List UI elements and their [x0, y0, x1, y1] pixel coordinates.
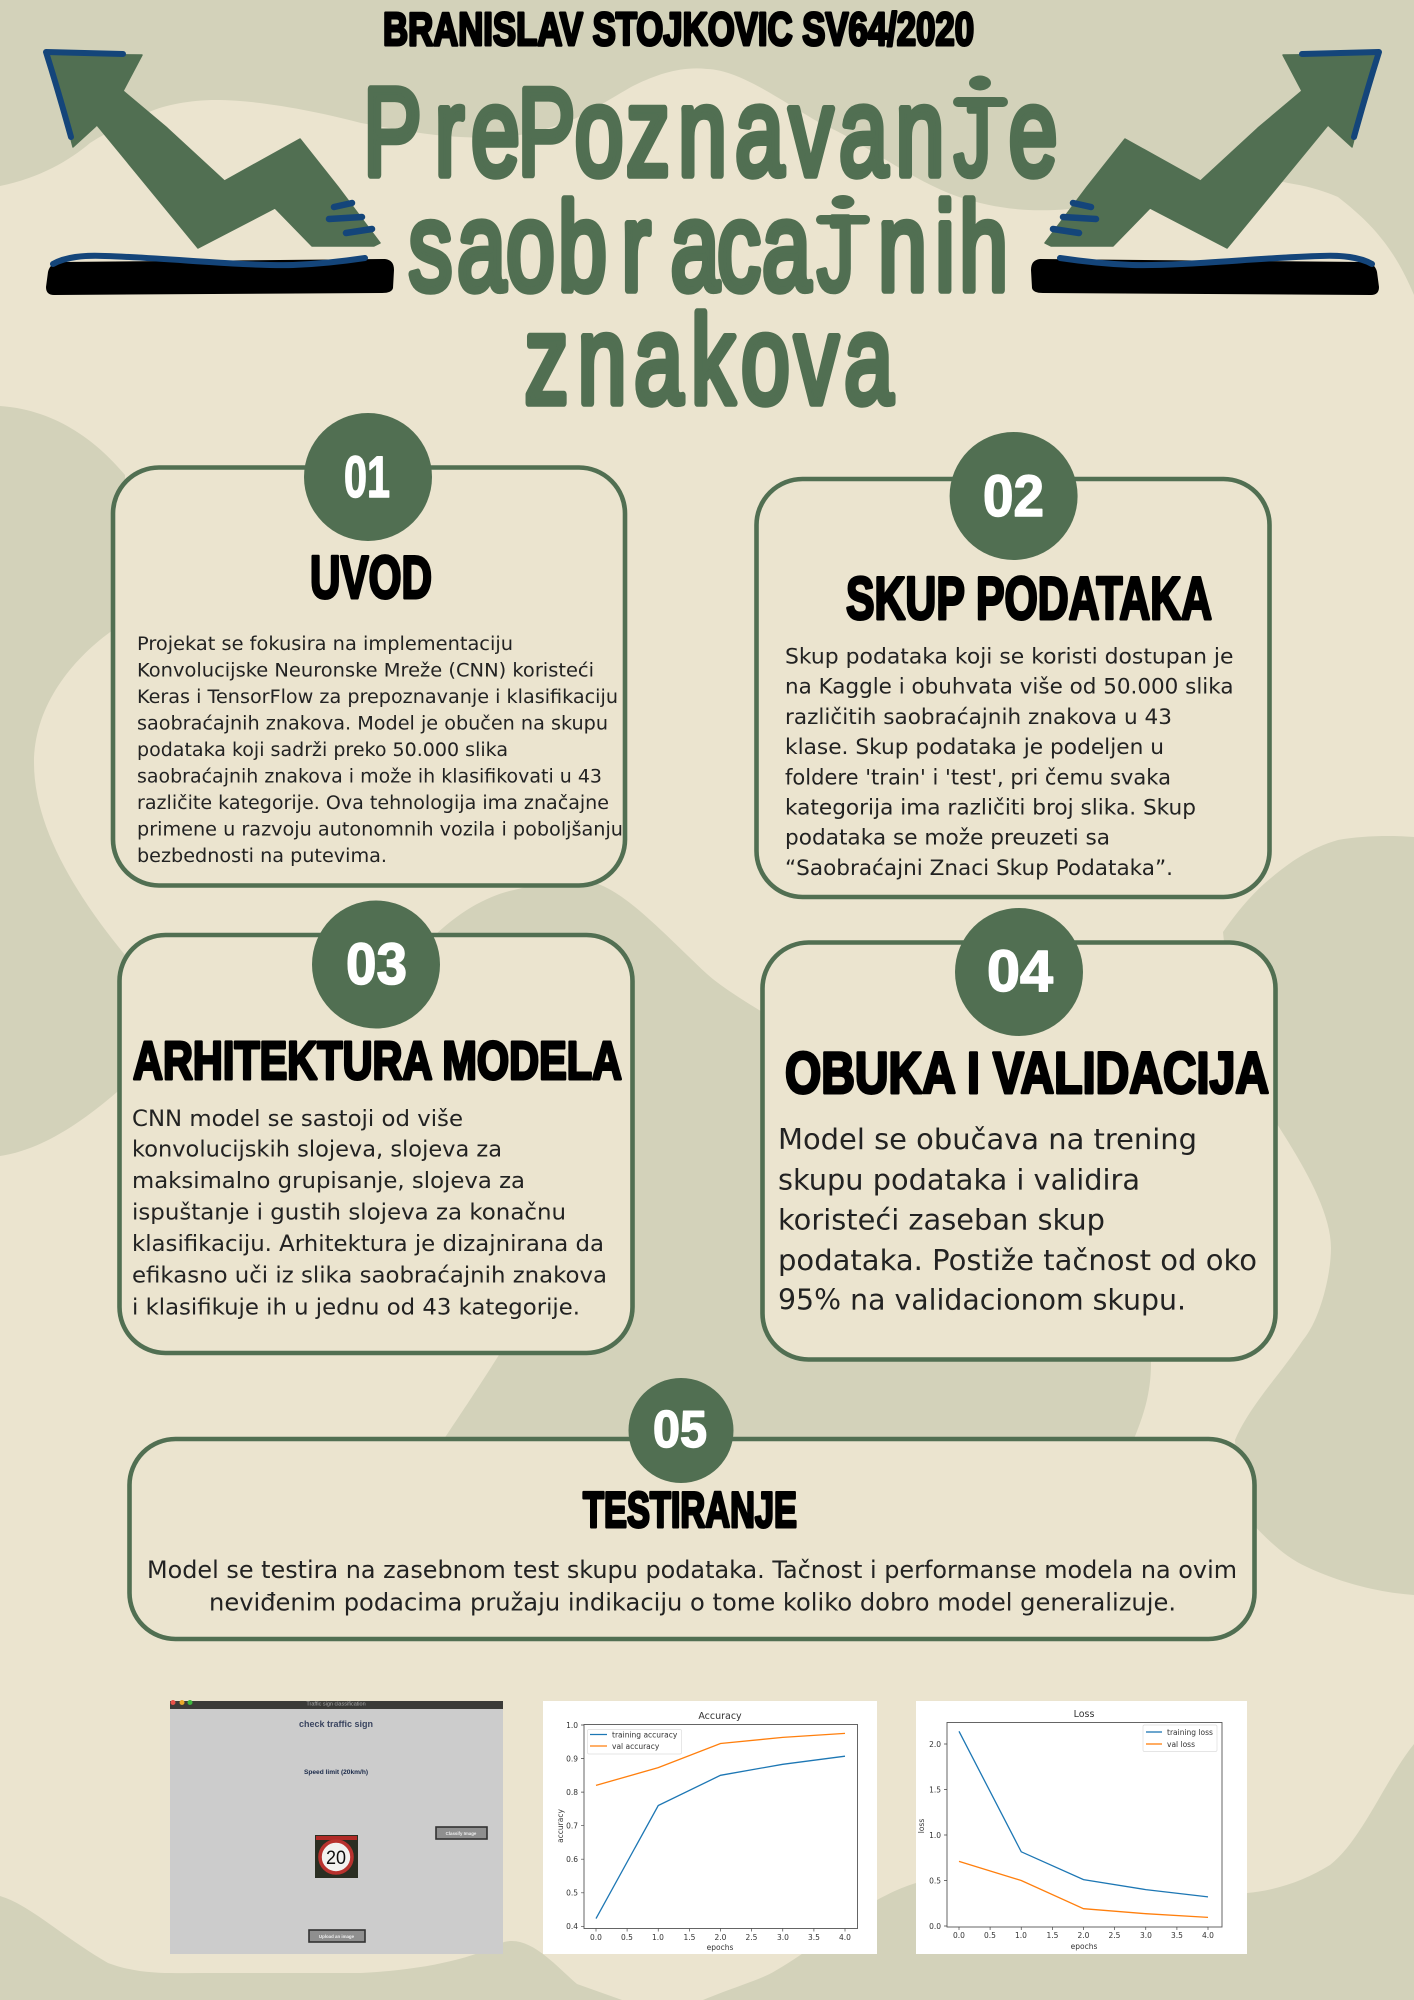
- line chart: accuracy: 1.0: [566, 1721, 578, 1730]
- panel: 03 arhitektura modela: maksimalno grupisanje, slojeva za: [132, 1169, 525, 1194]
- line chart: accuracy: 2.0: [715, 1933, 727, 1942]
- icon: left rising arrow on black base: [46, 52, 394, 295]
- panel: 04 obuka i validacija: [762, 908, 1276, 1360]
- panel: 05 testiranje: 05: [653, 1401, 707, 1459]
- line chart: accuracy: 2.5: [746, 1933, 758, 1942]
- line chart: loss: val loss: [1167, 1740, 1195, 1749]
- screenshot: traffic sign classification app: Speed limit (20km/h): [304, 1769, 368, 1776]
- line chart: loss: 1.5: [1047, 1931, 1059, 1940]
- line chart: accuracy: val accuracy: [612, 1742, 660, 1751]
- line chart: accuracy: 0.6: [566, 1855, 578, 1864]
- panel: 05 testiranje: Model se testira na zasebnom test skupu podataka. Tačnost i performanse modela na ovim: [147, 1556, 1237, 1584]
- line chart: loss: 2.5: [1109, 1931, 1121, 1940]
- screenshot: traffic sign classification app: Classify Image: [446, 1831, 477, 1836]
- panel: 04 obuka i validacija: OBUKA I VALIDACIJA: [785, 1041, 1269, 1106]
- icon: right rising arrow on black base: [1031, 52, 1379, 295]
- panel: 01 uvod: Projekat se fokusira na implementaciju: [137, 634, 513, 655]
- panel: 02 skup podataka: klase. Skup podataka je podeljen u: [785, 735, 1164, 759]
- panel: 02 skup podataka: podataka se može preuzeti sa: [785, 826, 1110, 850]
- panel: 03 arhitektura modela: i klasifikuje ih u jednu od 43 kategorije.: [132, 1296, 580, 1320]
- screenshot: traffic sign classification app: 20: [326, 1848, 346, 1869]
- panel: 02 skup podataka: kategorija ima različiti broj slika. Skup: [785, 796, 1196, 820]
- panel: 01 uvod: Konvolucijske Neuronske Mreže (CNN) koristeći: [137, 660, 594, 682]
- panel: 01 uvod: [113, 413, 625, 886]
- panel: 02 skup podataka: [756, 432, 1270, 897]
- line chart: accuracy: Accuracy: [698, 1711, 742, 1722]
- panel: 05 testiranje: [130, 1378, 1254, 1639]
- panel: 02 skup podataka: 02: [983, 464, 1044, 529]
- panel: 02 skup podataka: foldere 'train' i 'test', pri čemu svaka: [785, 766, 1171, 790]
- line chart: loss: 1.0: [1015, 1931, 1027, 1940]
- panel: 02 skup podataka: “Saobraćajni Znaci Skup Podataka”.: [785, 856, 1173, 880]
- line chart: loss: 0.5: [984, 1931, 996, 1940]
- panel: 02 skup podataka: različitih saobraćajnih znakova u 43: [785, 705, 1172, 729]
- panel: 01 uvod: različite kategorije. Ova tehnologija ima značajne: [137, 793, 609, 814]
- line chart: accuracy: 1.0: [652, 1933, 664, 1942]
- line chart: loss: 4.0: [1202, 1931, 1214, 1940]
- panel: 01 uvod: saobraćajnih znakova. Model je obučen na skupu: [137, 714, 608, 734]
- line chart: loss: [916, 1701, 1247, 1954]
- line chart: loss: loss: [917, 1819, 926, 1833]
- line chart: accuracy: training accuracy: [612, 1730, 678, 1740]
- line chart: accuracy: 0.5: [566, 1888, 578, 1898]
- panel: 01 uvod: primene u razvoju autonomnih vozila i poboljšanju: [137, 820, 623, 840]
- panel: 04 obuka i validacija: podataka. Postiže tačnost od oko: [778, 1244, 1257, 1277]
- screenshot: traffic sign classification app: Traffic sign classification: [306, 1702, 366, 1708]
- panel: 04 obuka i validacija: 95% na validacionom skupu.: [778, 1284, 1186, 1316]
- line chart: loss: 2.0: [1078, 1931, 1090, 1940]
- screenshot: traffic sign classification app: check traffic sign: [299, 1719, 373, 1729]
- panel: 02 skup podataka: SKUP PODATAKA: [846, 565, 1212, 632]
- panel: 03 arhitektura modela: konvolucijskih slojeva, slojeva za: [132, 1138, 502, 1162]
- line chart: loss: 0.0: [929, 1922, 941, 1931]
- line chart: loss: Loss: [1074, 1709, 1094, 1720]
- panel: 01 uvod: 01: [344, 445, 390, 510]
- panel: 04 obuka i validacija: 04: [987, 939, 1053, 1004]
- screenshot: traffic sign classification app: Upload an image: [319, 1934, 355, 1939]
- panel: 03 arhitektura modela: ispuštanje i gustih slojeva za konačnu: [132, 1200, 566, 1226]
- line chart: accuracy: accuracy: [556, 1809, 565, 1843]
- line chart: loss: epochs: [1071, 1942, 1097, 1951]
- line chart: accuracy: 0.4: [566, 1922, 578, 1931]
- line chart: accuracy: 3.0: [777, 1933, 789, 1942]
- line chart: loss: 2.0: [929, 1740, 941, 1749]
- panel: 04 obuka i validacija: koristeći zaseban skup: [778, 1204, 1105, 1236]
- line chart: accuracy: 4.0: [839, 1933, 851, 1942]
- line chart: loss: 3.5: [1171, 1931, 1183, 1940]
- line chart: loss: 3.0: [1140, 1931, 1152, 1940]
- line chart: accuracy: 1.5: [684, 1933, 696, 1942]
- panel: 01 uvod: UVOD: [310, 544, 432, 611]
- line chart: accuracy: 3.5: [808, 1933, 820, 1942]
- panel: 01 uvod: bezbednosti na putevima.: [137, 846, 387, 867]
- panel: 02 skup podataka: na Kaggle i obuhvata više od 50.000 slika: [785, 674, 1234, 698]
- author name: BRANISLAV STOJKOVIC SV64/2020: [383, 3, 974, 55]
- line chart: loss: 1.5: [929, 1786, 941, 1794]
- line chart: accuracy: 0.9: [566, 1754, 578, 1764]
- panel: 04 obuka i validacija: skupu podataka i validira: [778, 1164, 1140, 1196]
- panel: 04 obuka i validacija: Model se obučava na trening: [778, 1123, 1197, 1156]
- panel: 01 uvod: podataka koji sadrži preko 50.000 slika: [137, 740, 508, 761]
- panel: 03 arhitektura modela: ARHITEKTURA MODELA: [133, 1031, 622, 1091]
- panel: 03 arhitektura modela: CNN model se sastoji od više: [132, 1107, 463, 1132]
- main title: PrePoznavanJe: [363, 61, 1057, 202]
- panel: 05 testiranje: TESTIRANJE: [583, 1482, 797, 1538]
- main title: [363, 61, 1057, 430]
- panel: 05 testiranje: neviđenim podacima pružaju indikaciju o tome koliko dobro model generalizuje.: [209, 1588, 1176, 1616]
- main title: znakova: [525, 289, 893, 430]
- line chart: accuracy: 0.5: [621, 1933, 633, 1942]
- line chart: accuracy: 0.0: [590, 1933, 602, 1942]
- screenshot: traffic sign classification app: [170, 1700, 503, 1954]
- panel: 01 uvod: Keras i TensorFlow za prepoznavanje i klasifikaciju: [137, 687, 618, 708]
- line chart: loss: 0.5: [929, 1876, 941, 1886]
- line chart: accuracy: 0.7: [566, 1822, 578, 1830]
- line chart: accuracy: [543, 1701, 877, 1954]
- line chart: loss: 0.0: [953, 1931, 965, 1940]
- line chart: loss: training loss: [1167, 1728, 1213, 1737]
- panel: 03 arhitektura modela: efikasno uči iz slika saobraćajnih znakova: [132, 1264, 607, 1288]
- line chart: loss: 1.0: [929, 1831, 941, 1840]
- panel: 03 arhitektura modela: klasifikaciju. Arhitektura je dizajnirana da: [132, 1232, 604, 1257]
- line chart: accuracy: epochs: [707, 1943, 733, 1952]
- panel: 02 skup podataka: Skup podataka koji se koristi dostupan je: [785, 644, 1234, 668]
- panel: 03 arhitektura modela: [120, 900, 632, 1353]
- panel: 01 uvod: saobraćajnih znakova i može ih klasifikovati u 43: [137, 766, 602, 788]
- panel: 03 arhitektura modela: 03: [346, 932, 407, 997]
- line chart: accuracy: 0.8: [566, 1788, 578, 1797]
- main title: saobracaJnih: [409, 176, 1008, 317]
